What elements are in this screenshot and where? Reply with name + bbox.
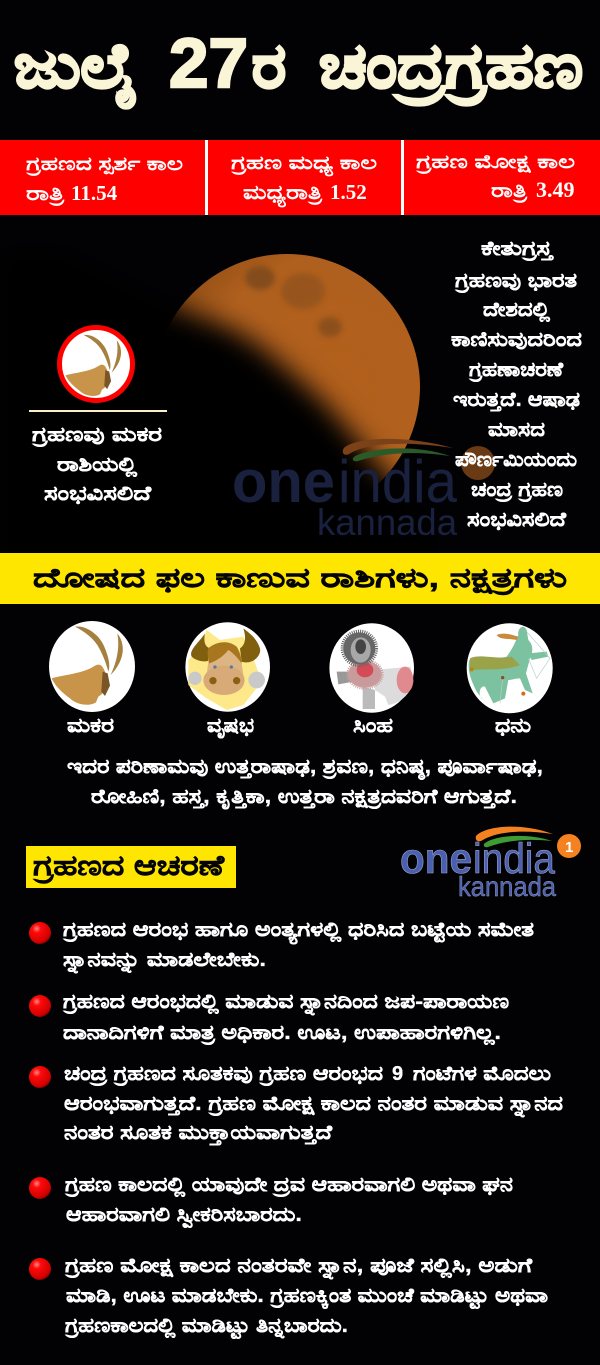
timing: middle (230, 153, 377, 208)
timing: middle: ಗ್ರಹಣ ಮಧ್ಯ ಕಾಲ (230, 153, 377, 178)
timing: contact: 11.54 (71, 181, 118, 205)
divider and zodiac caption: ಸಂಭವಿಸಲಿದೆ (44, 483, 153, 505)
watermark logo: kannada (317, 502, 457, 543)
timing: release: 3.49 (536, 177, 574, 202)
icon: sagittarius (467, 623, 553, 713)
timing: release (415, 152, 575, 204)
text block: moon description: ದೇಶದಲ್ಲಿ (483, 299, 550, 323)
bullet item 2: ಗ್ರಹಣದ ಆರಂಭದಲ್ಲಿ ಮಾಡುವ ಸ್ನಾನದಿಂದ ಜಪ-ಪಾರಾಯಣ (63, 991, 509, 1016)
divider and zodiac caption: ಗ್ರಹಣವು ಮಕರ (32, 424, 163, 448)
text block: moon description: ಕೇತುಗ್ರಸ್ತ (481, 238, 554, 262)
watermark logo: india (338, 448, 458, 515)
text block: moon description: ಇರುತ್ತದೆ. ಆಷಾಢ (453, 389, 580, 412)
panel: eclipse timings (0, 140, 600, 215)
text block: moon description: ಗ್ರಹಣವು ಭಾರತ (455, 270, 577, 294)
watermark logo (232, 439, 495, 543)
text block: affected stars: ರೋಹಿಣಿ, ಹಸ್ತ, ಕೃತ್ತಿಕಾ, ಉತ್ತರಾ ನಕ್ಷತ್ರದವರಿಗೆ ಆಗುತ್ತದೆ. (91, 786, 517, 810)
logo: oneindia kannada: india (473, 835, 555, 883)
bullet item 3: ಗಂಟೆಗಳ ಮೊದಲು (413, 1063, 551, 1085)
heading: affected signs: ದೋಷದ ಫಲ ಕಾಣುವ ರಾಶಿಗಳು, ನಕ್ಷತ್ರಗಳು (33, 563, 567, 596)
timing: middle: 1.52 (330, 180, 367, 204)
timing: release: ರಾತ್ರಿ (491, 180, 528, 204)
logo: oneindia kannada (400, 827, 581, 902)
moon image (170, 254, 420, 486)
bullet item 4 (29, 1174, 513, 1229)
divider and zodiac caption: ರಾಶಿಯಲ್ಲಿ (57, 454, 137, 478)
title: 27 (169, 24, 248, 102)
timing: contact: ರಾತ್ರಿ (26, 183, 65, 207)
label: capricorn: ಮಕರ (67, 715, 114, 737)
watermark logo: one (232, 448, 335, 515)
icon: capricorn (49, 621, 135, 712)
title: ಜುಲೈ (14, 32, 138, 109)
text block: affected stars (67, 756, 543, 810)
bullet item 1: ಗ್ರಹಣದ ಆರಂಭ ಹಾಗೂ ಅಂತ್ಯಗಳಲ್ಲಿ ಧರಿಸಿದ ಬಟ್ಟೆಯ ಸಮೇತ (63, 919, 534, 945)
title (14, 24, 583, 109)
text block: moon description: ಪೌರ್ಣಮಿಯಂದು (455, 449, 577, 471)
title: ಚಂದ್ರಗ್ರಹಣ (319, 32, 583, 106)
bullet item 3: ನಂತರ ಸೂತಕ ಮುಕ್ತಾಯವಾಗುತ್ತದೆ (64, 1122, 333, 1146)
bullet item 4: ಗ್ರಹಣ ಕಾಲದಲ್ಲಿ ಯಾವುದೇ ದ್ರವ ಆಹಾರವಾಗಲಿ ಅಥವಾ ಘನ (65, 1174, 513, 1198)
bullet item 4: ಆಹಾರವಾಗಲಿ ಸ್ವೀಕರಿಸಬಾರದು. (66, 1204, 302, 1229)
bullet item 5 (29, 1255, 548, 1340)
heading: eclipse observances (26, 846, 236, 888)
timing: contact: ಗ್ರಹಣದ ಸ್ಪರ್ಶ ಕಾಲ (25, 154, 183, 176)
bullet item 3: 9 (392, 1063, 403, 1085)
bullet item 5: ಗ್ರಹಣಕಾಲದಲ್ಲಿ ಮಾಡಿಟ್ಟು ತಿನ್ನಬಾರದು. (65, 1315, 348, 1340)
text block: moon description: ಗ್ರಹಣಾಚರಣೆ (469, 359, 564, 383)
bullet item 1 (29, 919, 534, 974)
label: leo: ಸಿಂಹ (353, 715, 393, 737)
logo: oneindia kannada: 1 (565, 839, 573, 856)
text block: moon description: ಕಾಣಿಸುವುದರಿಂದ (451, 329, 582, 351)
heading: eclipse observances: ಗ್ರಹಣದ ಆಚರಣೆ (32, 850, 225, 884)
bullet item 1: ಸ್ನಾನವನ್ನು ಮಾಡಲೇಬೇಕು. (63, 949, 266, 974)
bullet item 5: ಗ್ರಹಣ ಮೋಕ್ಷ ಕಾಲದ ನಂತರವೇ ಸ್ನಾನ, ಪೂಜೆ ಸಲ್ಲಿಸಿ, ಅಡುಗೆ (65, 1255, 533, 1280)
bullet item 5: ಮಾಡಿ, ಊಟ ಮಾಡಬೇಕು. ಗ್ರಹಣಕ್ಕಿಂತ ಮುಂಚೆ ಮಾಡಿಟ್ಟು ಅಥವಾ (66, 1285, 548, 1310)
text block: moon description: ಸಂಭವಿಸಲಿದೆ (467, 509, 567, 531)
divider and zodiac caption (29, 410, 167, 505)
text block: affected stars: ಇದರ ಪರಿಣಾಮವು ಉತ್ತರಾಷಾಢ, ಶ್ರವಣ, ಧನಿಷ್ಠ, ಪೂರ್ವಾಷಾಢ, (67, 756, 543, 781)
text block: moon description (451, 238, 582, 531)
text block: moon description: ಚಂದ್ರ ಗ್ರಹಣ (471, 479, 563, 503)
bullet item 2: ದಾನಾದಿಗಳಿಗೆ ಮಾತ್ರ ಅಧಿಕಾರ. ಊಟ, ಉಪಾಹಾರಗಳಿಗಿಲ್ಲ. (63, 1022, 501, 1046)
icon: capricorn in red ring (60, 328, 132, 400)
icon: taurus (185, 622, 270, 712)
text block: moon description: ಮಾಸದ (488, 419, 545, 441)
label: taurus: ವೃಷಭ (207, 715, 254, 739)
bullet item 2 (29, 991, 509, 1046)
title: ರ (252, 32, 286, 101)
logo: oneindia kannada: one (400, 835, 472, 883)
icon: leo (329, 623, 414, 713)
bullet item 3 (29, 1063, 563, 1146)
logo: oneindia kannada: kannada (458, 871, 556, 902)
bullet item 3: ಆರಂಭವಾಗುತ್ತದೆ. ಗ್ರಹಣ ಮೋಕ್ಷ ಕಾಲದ ನಂತರ ಮಾಡುವ ಸ್ನಾನದ (64, 1093, 563, 1118)
timing: contact (25, 154, 183, 207)
bullet item 3: ಚಂದ್ರ ಗ್ರಹಣದ ಸೂತಕವು ಗ್ರಹಣ ಆರಂಭದ (64, 1063, 383, 1087)
label: sagittarius: ಧನು (495, 715, 531, 737)
timing: release: ಗ್ರಹಣ ಮೋಕ್ಷ ಕಾಲ (415, 152, 575, 174)
timing: middle: ಮಧ್ಯರಾತ್ರಿ (243, 182, 323, 208)
